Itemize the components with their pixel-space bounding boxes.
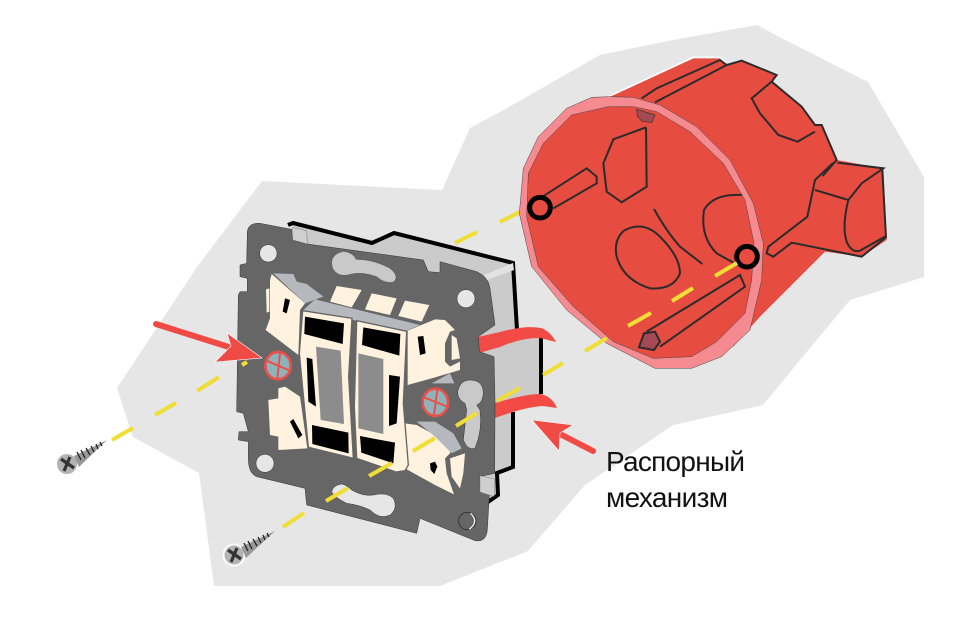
spacer tabs [478,327,557,418]
box inner face [527,107,754,358]
slot: corner hole [459,512,476,530]
rocker keys [299,311,408,472]
lower red tab [495,394,557,418]
upper red tab [478,327,556,353]
label: spacer mechanism [606,446,745,513]
lower wood screw [224,531,275,566]
corner tabs [292,227,495,497]
pink rim [519,97,763,368]
mounting plate [237,223,495,541]
dashed guide line: upper screw, lower part [112,211,522,440]
box ridges and knockouts [642,60,886,257]
arrow: to switch screw [156,324,262,362]
inner face details [540,127,745,347]
dashed guide line: over switch and box [242,263,737,527]
switch back housing [288,222,541,502]
mounting hole rings [530,197,757,267]
black windows [283,298,437,474]
box body [610,58,887,347]
label: spacer mechanism: Распорный [606,446,745,477]
upper wood screw [57,440,107,474]
grey bevels [273,273,462,453]
grey rocker panels [316,347,383,434]
plate body [237,223,495,541]
white highlight on box top edge [608,57,727,97]
stud caps [639,332,660,350]
label: spacer mechanism: механизм [606,482,728,513]
flush box [519,57,887,368]
cream mechanism pieces [266,274,465,494]
arrow: to spacer mechanism [532,420,593,451]
left screw [265,352,291,379]
right screw [423,389,448,416]
background shape [117,25,924,586]
slot: top keyhole [332,251,396,282]
holes [256,245,475,517]
slot: right keyhole [458,380,483,449]
